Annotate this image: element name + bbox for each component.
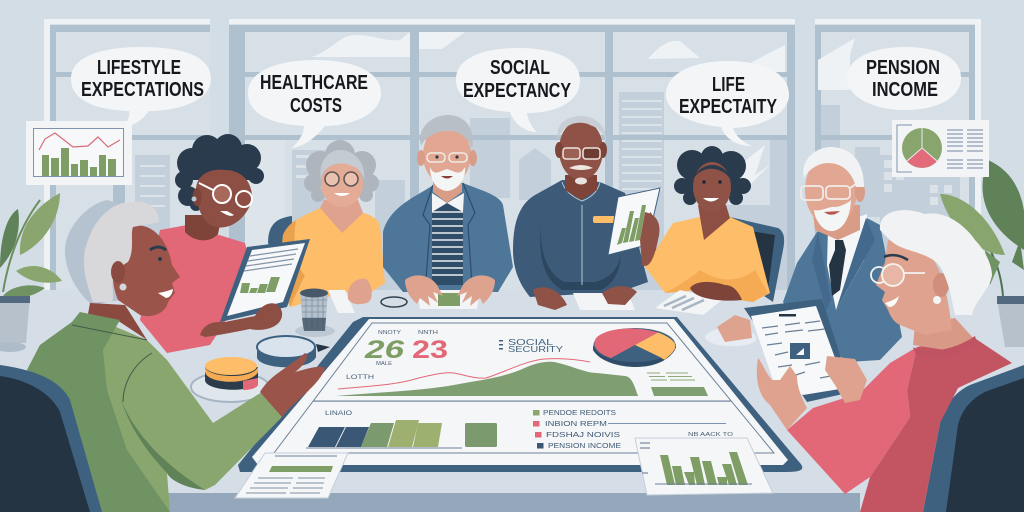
dashboard mat: [238, 317, 802, 472]
chart card left: [26, 121, 132, 185]
legend: NB AACK TO: [688, 432, 734, 438]
bubble: lifestyle expectations: EXPECTATIONS: [81, 78, 204, 101]
bubble: life expectaity: [666, 61, 789, 146]
person: man in blue blazer: [383, 115, 513, 309]
pie chart: [593, 328, 676, 367]
glass on table: [295, 288, 335, 337]
KPI numbers: NNTH: [418, 330, 438, 336]
plant right: [940, 160, 1024, 347]
coin stack: [191, 357, 269, 402]
bubble: life expectaity: LIFE: [712, 73, 745, 96]
person: front left woman in green: [27, 200, 325, 512]
person: man in navy jacket: [513, 116, 660, 310]
legend: PENDOE REDOITS: [543, 410, 616, 417]
plant left: [0, 193, 62, 352]
person: woman in yellow blouse chair: [730, 217, 784, 302]
bar chart: LINAIO: [325, 410, 352, 417]
paper with bar chart, right: [635, 438, 773, 495]
windows and skyline: [44, 19, 981, 295]
area chart: [336, 359, 708, 396]
bubble: social expectancy: [456, 48, 580, 132]
person: older man in suit: [705, 147, 902, 362]
bubble: social expectancy: EXPECTANCY: [463, 79, 571, 102]
bubble: lifestyle expectations: [71, 47, 211, 127]
person: woman in yellow top with grey hair: [282, 140, 385, 313]
bubble: healthcare costs: COSTS: [290, 94, 342, 117]
bubble: pension income: [847, 47, 961, 110]
bubble: healthcare costs: [248, 60, 381, 148]
bubble: healthcare costs: HEALTHCARE: [260, 71, 368, 94]
KPI numbers: NNOTY: [378, 330, 401, 336]
person: yellow top woman chair: [268, 216, 292, 250]
person: front right woman chair: [923, 365, 1024, 512]
legend: FDSHAJ NOIVIS: [546, 432, 620, 439]
social security heading: [499, 337, 563, 354]
table: [0, 290, 1024, 512]
chart card right: [892, 120, 989, 177]
person: front right woman: [744, 210, 1024, 512]
magnifier case: [257, 336, 330, 367]
legend: [533, 410, 734, 450]
bubble: lifestyle expectations: LIFESTYLE: [97, 56, 181, 79]
paper with green bar, left: [235, 453, 348, 498]
person: front left woman chair: [0, 365, 102, 512]
legend: INBION REPM: [545, 421, 607, 428]
KPI numbers: MALE: [376, 361, 392, 367]
social security heading: SOCIAL: [508, 337, 553, 347]
area chart: LOTTH: [346, 375, 374, 381]
reading glasses: [381, 297, 407, 307]
KPI numbers: 26: [364, 336, 406, 364]
bubble: pension income: INCOME: [872, 78, 938, 101]
bubble: life expectaity: EXPECTAITY: [679, 95, 777, 118]
bar chart: [306, 410, 497, 448]
person: woman in pink with afro: [140, 134, 310, 353]
social security heading: SECURITY: [508, 344, 563, 354]
bubble: social expectancy: SOCIAL: [490, 56, 550, 79]
legend: PENSION INCOME: [548, 443, 621, 450]
bubble: pension income: PENSION: [866, 56, 940, 79]
person: woman in yellow blouse: [640, 146, 775, 315]
KPI numbers: [364, 330, 448, 367]
KPI numbers: 23: [412, 336, 448, 364]
